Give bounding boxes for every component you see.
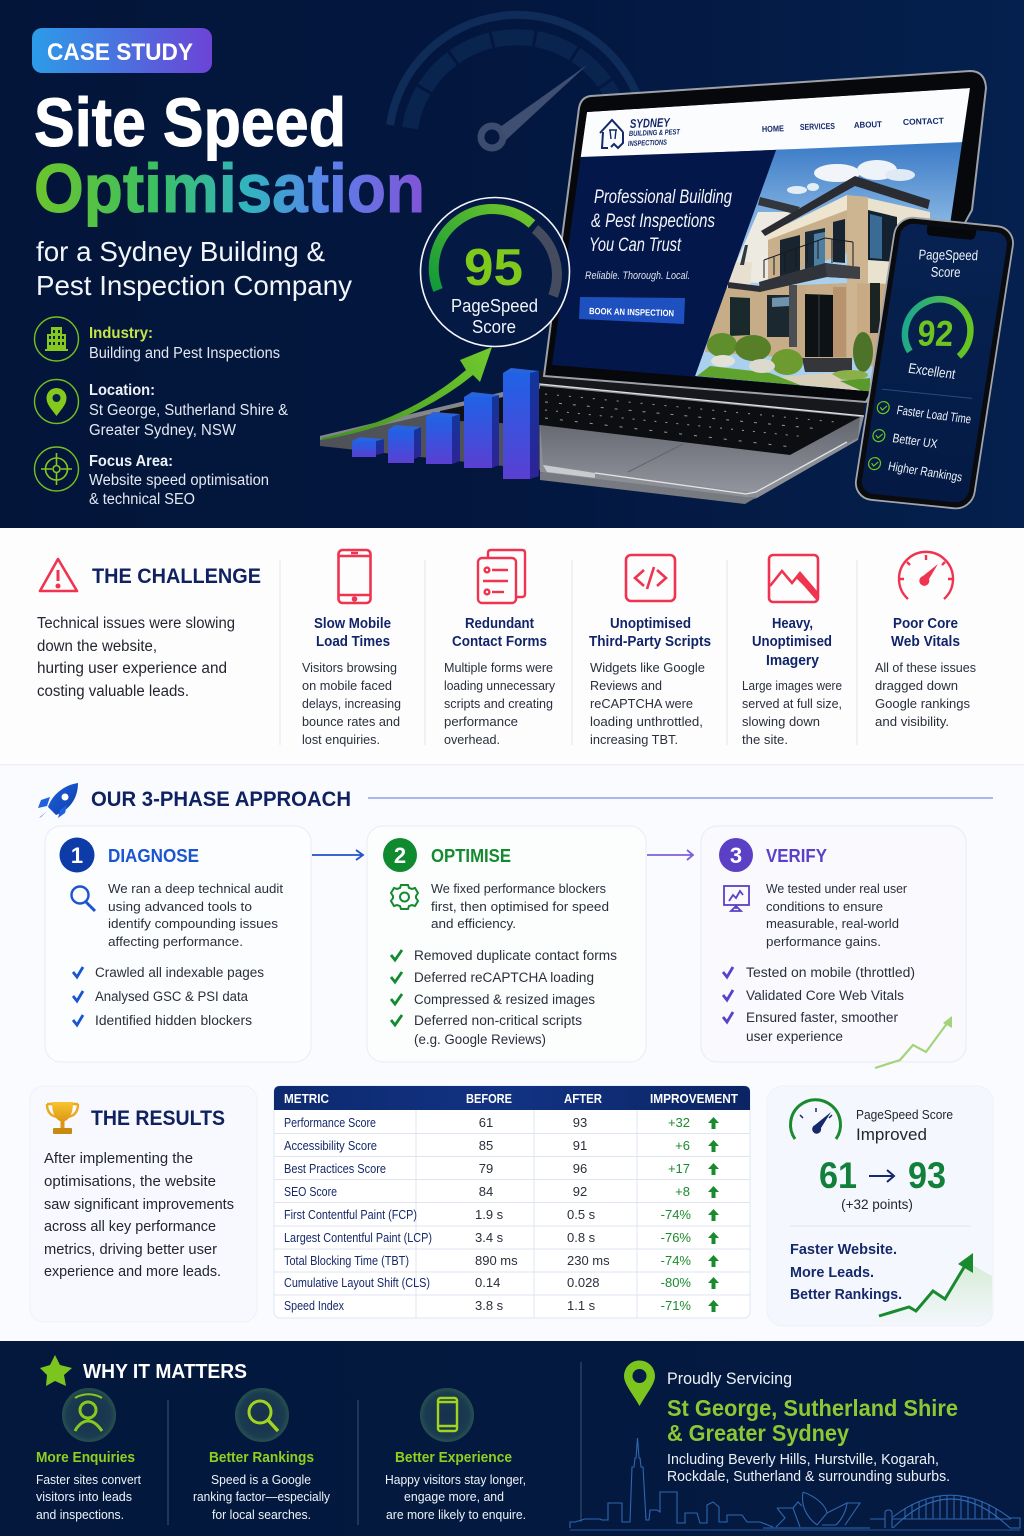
benefit: better experience: [385, 1388, 526, 1522]
row: seo score: [284, 1184, 719, 1199]
laptop screen: [552, 88, 970, 410]
challenge: third-party scripts: reCAPTCHA were: [590, 696, 693, 711]
card: verify: 3: [730, 843, 742, 868]
bar chart: [352, 368, 539, 479]
row: performance score: 93: [573, 1115, 587, 1130]
panel: the results: [30, 1086, 993, 1326]
benefit: more enquiries: Faster sites convert: [36, 1473, 141, 1487]
phone label: PageSpeed: [918, 246, 979, 263]
row: cls: 0.028: [567, 1275, 600, 1290]
card: verify: user experience: [746, 1029, 843, 1044]
challenge: slow mobile: Visitors browsing: [302, 660, 397, 675]
benefits: Faster Website.: [790, 1241, 897, 1258]
challenge intro: Technical issues were slowing: [37, 615, 235, 632]
panel: why it matters: [0, 1341, 1024, 1536]
subtitle: [36, 236, 352, 301]
challenge: heavy imagery: Unoptimised: [752, 634, 832, 650]
info: industry: Industry:: [89, 325, 153, 342]
benefit: better experience: Happy visitors stay longer,: [385, 1473, 526, 1487]
challenge: redundant forms: [444, 550, 555, 747]
row: accessibility score: Accessibility Score: [284, 1138, 377, 1153]
row: lcp: Largest Contentful Paint (LCP): [284, 1230, 432, 1245]
row: cls: Cumulative Layout Shift (CLS): [284, 1275, 430, 1290]
card: verify: measurable, real-world: [766, 916, 899, 931]
service area: St George, Sutherland Shire: [667, 1395, 958, 1421]
score change: 93: [908, 1155, 946, 1196]
card: diagnose: We ran a deep technical audit: [108, 881, 283, 896]
card: diagnose: Crawled all indexable pages: [95, 965, 264, 980]
benefit: better rankings: for local searches.: [212, 1508, 311, 1522]
site headline: You Can Trust: [589, 235, 682, 256]
score circle: 95: Score: [472, 317, 516, 337]
blue panel: [552, 150, 776, 376]
challenge: redundant forms: scripts and creating: [444, 696, 553, 711]
card: results summary: experience and more leads.: [44, 1263, 221, 1280]
card: optimise: OPTIMISE: [431, 846, 511, 866]
challenge: redundant forms: Multiple forms were: [444, 660, 553, 675]
phone checks: Higher Rankings: [887, 459, 964, 485]
row: performance score: +32: [668, 1115, 690, 1130]
row: cls: [284, 1275, 719, 1290]
card: results summary: saw significant improvements: [44, 1196, 234, 1213]
card: verify: VERIFY: [766, 846, 827, 866]
card: pagespeed improved: (+32 points): [841, 1197, 913, 1212]
icon: location pin: [624, 1360, 655, 1406]
laptop: [320, 71, 986, 504]
row: best practices score: +17: [668, 1161, 690, 1176]
card: diagnose: Identified hidden blockers: [95, 1013, 252, 1028]
heading: the challenge: THE CHALLENGE: [92, 565, 261, 588]
service area: Rockdale, Sutherland & surrounding suburbs.: [667, 1469, 950, 1485]
card: results summary: After implementing the: [44, 1150, 193, 1167]
row: speed index: 3.8 s: [475, 1298, 504, 1313]
challenge: redundant forms: overhead.: [444, 732, 500, 747]
row: seo score: 92: [573, 1184, 587, 1199]
site headline: & Pest Inspections: [591, 211, 715, 232]
benefit: better rankings: Speed is a Google: [211, 1473, 311, 1487]
benefit: better experience: engage more, and: [404, 1490, 504, 1504]
score circle: 95: PageSpeed: [451, 296, 538, 316]
title: Site Speed: [34, 84, 346, 161]
site nav: CONTACT: [903, 116, 945, 127]
challenge: slow mobile: Load Times: [316, 634, 390, 650]
challenge: slow mobile: on mobile faced: [302, 678, 392, 693]
info: industry: Building and Pest Inspections: [89, 345, 280, 362]
info: focus area: Focus Area:: [89, 453, 173, 470]
row: accessibility score: [284, 1138, 719, 1153]
card: verify: Tested on mobile (throttled): [746, 965, 915, 980]
card: optimise: [367, 826, 646, 1062]
table header: METRIC: [284, 1092, 329, 1106]
row: best practices score: [284, 1161, 719, 1176]
panel: 3-phase approach: [0, 764, 1024, 1341]
challenge: slow mobile: delays, increasing: [302, 696, 401, 711]
table header: [284, 1092, 738, 1106]
card: optimise: and efficiency.: [431, 916, 516, 931]
site nav: SERVICES: [800, 121, 835, 132]
benefits: Better Rankings.: [790, 1286, 902, 1303]
challenge intro: hurting user experience and: [37, 660, 227, 677]
card: diagnose: DIAGNOSE: [108, 846, 199, 866]
card: optimise: 2: [394, 843, 406, 868]
card: optimise: Removed duplicate contact forms: [414, 948, 617, 963]
site nav: HOME: [762, 123, 784, 134]
illustration: sydney skyline: [570, 1438, 1020, 1530]
row: tbt: 890 ms: [475, 1253, 518, 1268]
challenge intro: [37, 615, 235, 700]
challenge: heavy imagery: Imagery: [766, 653, 819, 669]
panel: the challenge: [0, 528, 1024, 764]
row: fcp: First Contentful Paint (FCP): [284, 1207, 417, 1222]
challenge: redundant forms: loading unnecessary: [444, 678, 555, 693]
site brand: INSPECTIONS: [628, 138, 667, 148]
arrow: optimise to verify: [647, 850, 693, 860]
card: diagnose: 1: [71, 843, 83, 868]
row: best practices score: 96: [573, 1161, 587, 1176]
challenge: third-party scripts: Widgets like Google: [590, 660, 705, 675]
subtitle: Pest Inspection Company: [36, 270, 352, 301]
card: diagnose: [45, 826, 311, 1062]
challenge: third-party scripts: loading unthrottled,: [590, 714, 703, 729]
phone label: [914, 241, 980, 284]
row: tbt: -74%: [661, 1253, 691, 1268]
row: speed index: 1.1 s: [567, 1298, 596, 1313]
challenge: core web vitals: Google rankings: [875, 696, 970, 711]
challenge: core web vitals: [875, 552, 976, 729]
benefit: better experience: Better Experience: [395, 1450, 512, 1466]
info: focus area: [34, 447, 269, 508]
info: location: St George, Sutherland Shire &: [89, 402, 289, 419]
row: accessibility score: 85: [479, 1138, 493, 1153]
benefit: better rankings: ranking factor—especially: [193, 1490, 331, 1504]
card: optimise: first, then optimised for speed: [431, 899, 609, 914]
challenge: third-party scripts: Third-Party Scripts: [589, 634, 711, 650]
challenge: third-party scripts: Unoptimised: [610, 616, 691, 632]
site logo: [600, 120, 623, 148]
site button: [579, 297, 685, 324]
heading: why it matters: WHY IT MATTERS: [83, 1361, 247, 1383]
title: Optimisation: [34, 150, 425, 227]
row: accessibility score: 91: [573, 1138, 587, 1153]
laptop lid: [544, 71, 986, 402]
results table: [274, 1086, 750, 1318]
table header: BEFORE: [466, 1092, 512, 1106]
benefit: more enquiries: visitors into leads: [36, 1490, 132, 1504]
row: cls: -80%: [661, 1275, 691, 1290]
site nav: ABOUT: [854, 119, 883, 130]
phone gauge: 92: [916, 312, 955, 354]
challenge: core web vitals: Poor Core: [893, 616, 958, 632]
challenge: slow mobile: bounce rates and: [302, 714, 400, 729]
row: performance score: 61: [479, 1115, 493, 1130]
row: best practices score: Best Practices Score: [284, 1161, 386, 1176]
score change: [819, 1155, 946, 1196]
benefits: More Leads.: [790, 1264, 874, 1281]
card: diagnose: Analysed GSC & PSI data: [95, 989, 248, 1004]
card: pagespeed improved: Improved: [856, 1126, 927, 1144]
row: fcp: 1.9 s: [475, 1207, 504, 1222]
card: verify: Ensured faster, smoother: [746, 1010, 899, 1025]
card: pagespeed improved: PageSpeed Score: [856, 1108, 953, 1122]
phone: [853, 216, 1016, 510]
challenge: third-party scripts: [589, 555, 711, 747]
score circle: 95: [420, 198, 570, 346]
challenge intro: down the website,: [37, 638, 157, 655]
info: industry: [34, 317, 280, 362]
benefit: more enquiries: [36, 1388, 141, 1522]
score change: 61: [819, 1155, 857, 1196]
site tagline: Reliable. Thorough. Local.: [585, 270, 690, 282]
row: tbt: [284, 1253, 719, 1268]
row: seo score: 84: [479, 1184, 493, 1199]
row: fcp: [284, 1207, 719, 1222]
growth arrow: [322, 347, 492, 440]
card: diagnose: affecting performance.: [108, 934, 243, 949]
heading: approach: OUR 3-PHASE APPROACH: [91, 788, 351, 811]
row: lcp: 3.4 s: [475, 1230, 504, 1245]
challenge intro: costing valuable leads.: [37, 683, 189, 700]
site brand: [628, 118, 680, 146]
phone checks: [867, 401, 973, 485]
site brand: SYDNEY: [630, 116, 671, 131]
row: performance score: Performance Score: [284, 1115, 376, 1130]
benefit: better rankings: [193, 1388, 331, 1522]
row: seo score: +8: [675, 1184, 690, 1199]
challenge: slow mobile: [302, 550, 401, 747]
icon: rocket: [38, 783, 78, 818]
card: results summary: THE RESULTS: [91, 1107, 225, 1130]
challenge: slow mobile: Slow Mobile: [314, 616, 391, 632]
phone checks: Better UX: [891, 431, 939, 451]
score circle: 95: 95: [464, 239, 523, 297]
panel: hero: [0, 0, 1024, 528]
row: tbt: 230 ms: [567, 1253, 610, 1268]
row: accessibility score: +6: [675, 1138, 690, 1153]
card: results summary: across all key performance: [44, 1218, 216, 1235]
icon: warning triangle: [40, 559, 77, 591]
benefits: [790, 1241, 902, 1303]
service area: Including Beverly Hills, Hurstville, Kogarah,: [667, 1452, 939, 1468]
arrow: diagnose to optimise: [312, 850, 363, 860]
title: [34, 84, 425, 227]
badge: case study: CASE STUDY: [47, 39, 193, 66]
row: lcp: 0.8 s: [567, 1230, 596, 1245]
card: results summary: [30, 1086, 257, 1322]
challenge: heavy imagery: served at full size,: [742, 696, 842, 711]
challenge: heavy imagery: Heavy,: [772, 616, 813, 632]
benefit: better rankings: Better Rankings: [209, 1450, 314, 1466]
laptop base: [320, 370, 866, 504]
service area: [667, 1369, 958, 1485]
row: lcp: -76%: [661, 1230, 691, 1245]
site header: [580, 88, 970, 158]
site nav: [762, 118, 944, 132]
benefit: more enquiries: More Enquiries: [36, 1450, 135, 1466]
info: location: Greater Sydney, NSW: [89, 422, 236, 439]
row: best practices score: 79: [479, 1161, 493, 1176]
phone gauge: [902, 296, 975, 359]
row: speed index: Speed Index: [284, 1298, 344, 1313]
card: diagnose: identify compounding issues: [108, 916, 279, 931]
card: pagespeed improved: [767, 1086, 993, 1326]
site button: BOOK AN INSPECTION: [589, 306, 674, 318]
subtitle: for a Sydney Building &: [36, 236, 325, 267]
challenge: heavy imagery: slowing down: [742, 714, 820, 729]
card: diagnose: using advanced tools to: [108, 899, 252, 914]
row: tbt: Total Blocking Time (TBT): [284, 1253, 409, 1268]
challenge: slow mobile: lost enquiries.: [302, 732, 380, 747]
card: verify: [701, 826, 966, 1062]
challenge: core web vitals: All of these issues: [875, 660, 976, 675]
icon: trophy: [47, 1102, 78, 1134]
card: optimise: Deferred non-critical scripts: [414, 1013, 582, 1028]
site brand: BUILDING & PEST: [629, 127, 681, 138]
row: fcp: 0.5 s: [567, 1207, 596, 1222]
card: results summary: metrics, driving better user: [44, 1241, 217, 1258]
benefit: better experience: are more likely to enquire.: [386, 1508, 526, 1522]
background speedometer: [390, 15, 637, 148]
card: results summary: optimisations, the website: [44, 1173, 216, 1190]
site headline: Professional Building: [594, 187, 732, 208]
card: optimise: (e.g. Google Reviews): [414, 1032, 546, 1047]
table header: IMPROVEMENT: [650, 1092, 738, 1106]
badge: case study: [32, 28, 212, 73]
phone label: Score: [930, 264, 961, 280]
challenge: heavy imagery: Large images were: [742, 678, 842, 693]
table header: AFTER: [564, 1092, 602, 1106]
row: seo score: SEO Score: [284, 1184, 337, 1199]
challenge: core web vitals: and visibility.: [875, 714, 949, 729]
row: lcp: [284, 1230, 719, 1245]
challenge: heavy imagery: the site.: [742, 732, 788, 747]
challenge: redundant forms: Redundant: [465, 616, 534, 632]
row: speed index: [284, 1298, 719, 1313]
row: speed index: -71%: [661, 1298, 691, 1313]
site headline: [590, 189, 732, 251]
info: focus area: & technical SEO: [89, 491, 195, 508]
challenge: third-party scripts: Reviews and: [590, 678, 662, 693]
row: performance score: [284, 1115, 719, 1130]
challenge: core web vitals: Web Vitals: [891, 634, 960, 650]
card: optimise: We fixed performance blockers: [431, 881, 606, 896]
challenge: core web vitals: dragged down: [875, 678, 958, 693]
sparkline: [879, 1253, 992, 1325]
info: location: [34, 380, 289, 439]
service area: & Greater Sydney: [667, 1420, 849, 1446]
icon: star: [40, 1355, 72, 1386]
icon: gauge: [790, 1100, 841, 1139]
phone checks: Faster Load Time: [896, 403, 972, 427]
card: verify: performance gains.: [766, 934, 881, 949]
benefit: more enquiries: and inspections.: [36, 1508, 124, 1522]
phone rating: Excellent: [907, 360, 957, 382]
row: fcp: -74%: [661, 1207, 691, 1222]
info: focus area: Website speed optimisation: [89, 472, 269, 489]
service area: Proudly Servicing: [667, 1369, 792, 1388]
challenge: redundant forms: Contact Forms: [452, 634, 547, 650]
challenge: redundant forms: performance: [444, 714, 518, 729]
card: optimise: Deferred reCAPTCHA loading: [414, 970, 594, 985]
card: verify: We tested under real user: [766, 881, 908, 896]
card: optimise: Compressed & resized images: [414, 992, 595, 1007]
challenge: heavy imagery: [742, 555, 842, 747]
challenge: third-party scripts: increasing TBT.: [590, 732, 678, 747]
row: cls: 0.14: [475, 1275, 500, 1290]
sparkline arrow: [875, 1016, 952, 1068]
card: verify: conditions to ensure: [766, 899, 883, 914]
info: location: Location:: [89, 382, 155, 399]
card: verify: Validated Core Web Vitals: [746, 988, 904, 1003]
site photo: house: [695, 138, 963, 392]
